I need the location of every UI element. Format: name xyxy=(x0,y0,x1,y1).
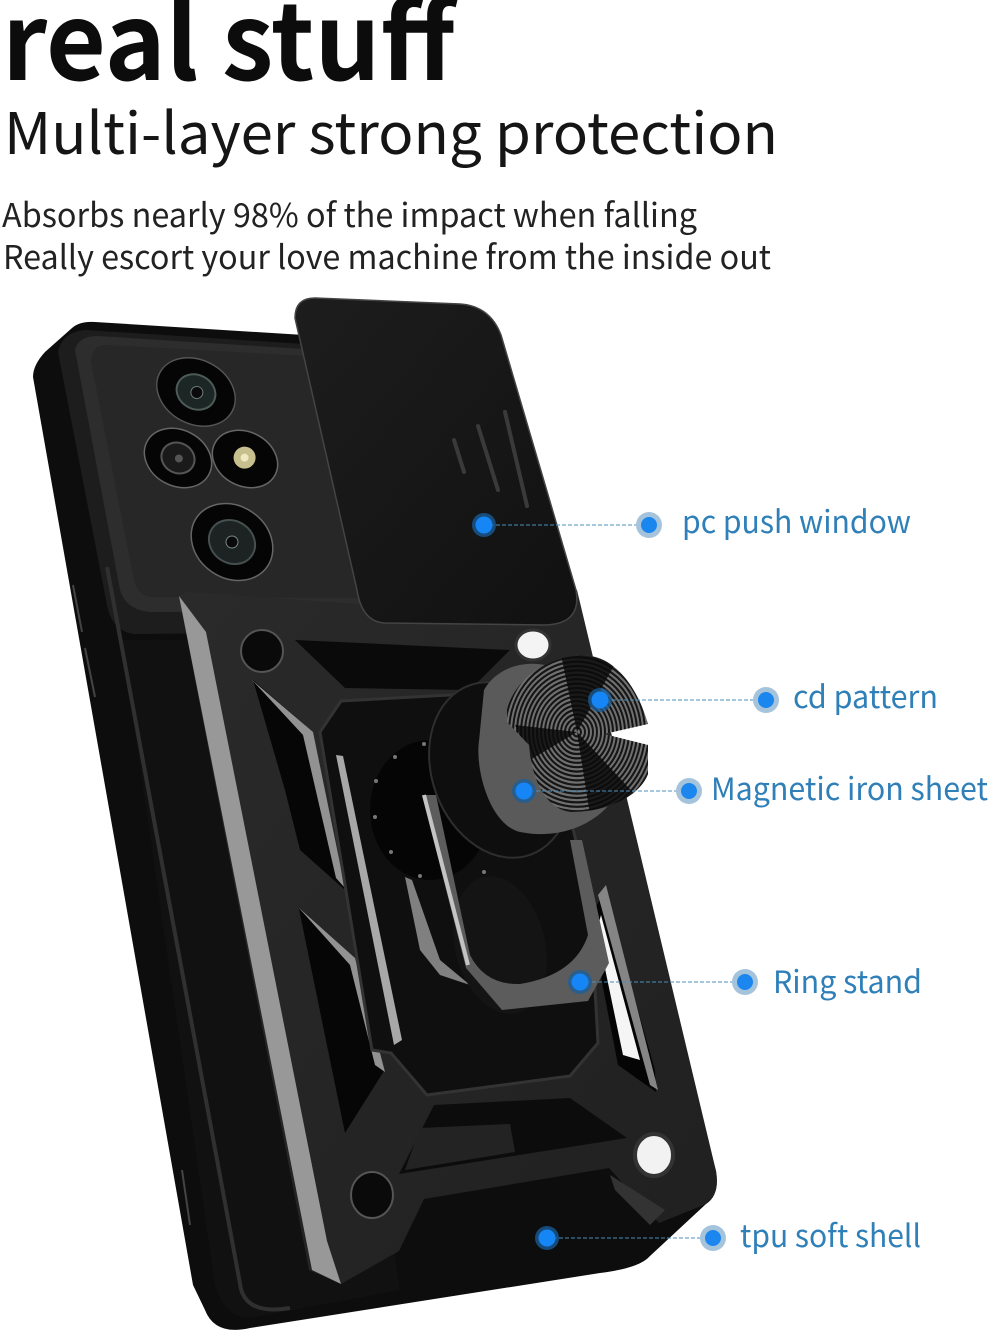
armor left upper recess xyxy=(253,680,345,890)
description text: Absorbs nearly 98% of the impact when falling xyxy=(2,189,697,237)
oval inner recess xyxy=(439,866,561,1024)
lower back panel xyxy=(122,640,400,1318)
camera island rim xyxy=(58,330,372,634)
camera flash xyxy=(202,419,288,499)
description text xyxy=(2,189,771,279)
callout: tpu soft shell xyxy=(535,1211,921,1256)
disc dark sheen xyxy=(515,656,634,811)
camera island xyxy=(91,345,370,598)
camera lens 3 xyxy=(176,488,288,596)
callout: pc push window: pc push window xyxy=(682,497,911,542)
callout: tpu soft shell: tpu soft shell xyxy=(740,1211,921,1256)
callout: ring stand: Ring stand xyxy=(773,957,922,1002)
callout: cd pattern xyxy=(588,672,938,717)
description text: Really escort your love machine from the inside out xyxy=(3,231,771,279)
back panel rim xyxy=(107,567,290,1309)
magnet cylinder xyxy=(405,662,595,878)
callout: pc push window xyxy=(472,497,911,542)
armor center frame xyxy=(320,690,598,1095)
bottom corner step xyxy=(610,1175,665,1225)
armor left lower recess xyxy=(299,909,384,1133)
slider window xyxy=(295,298,577,625)
armor bottom recess xyxy=(399,1098,627,1174)
armor top recess xyxy=(295,640,510,690)
camera lens 2 xyxy=(134,417,222,499)
phone case illustration xyxy=(33,298,717,1330)
armor right recess with cut-out xyxy=(590,890,656,1092)
subtitle: Multi-layer strong protection xyxy=(4,89,778,171)
magnetic iron sheet xyxy=(478,664,620,834)
callout: magnetic iron sheet xyxy=(512,764,988,809)
center silver rail xyxy=(336,755,402,1045)
slider grip lines xyxy=(454,412,527,506)
armor silver edge xyxy=(179,596,341,1284)
callout: magnetic iron sheet: Magnetic iron sheet xyxy=(711,764,988,809)
mount plate dots xyxy=(370,740,490,880)
side buttons xyxy=(73,585,190,1225)
callout: cd pattern: cd pattern xyxy=(793,672,938,717)
armor plate xyxy=(179,590,717,1284)
camera lens 1 xyxy=(145,344,247,440)
soft shell body xyxy=(33,322,717,1330)
screw holes xyxy=(241,630,283,672)
cd pattern disc xyxy=(507,656,648,812)
callout: ring stand xyxy=(568,957,922,1002)
ring stand xyxy=(422,795,609,1010)
